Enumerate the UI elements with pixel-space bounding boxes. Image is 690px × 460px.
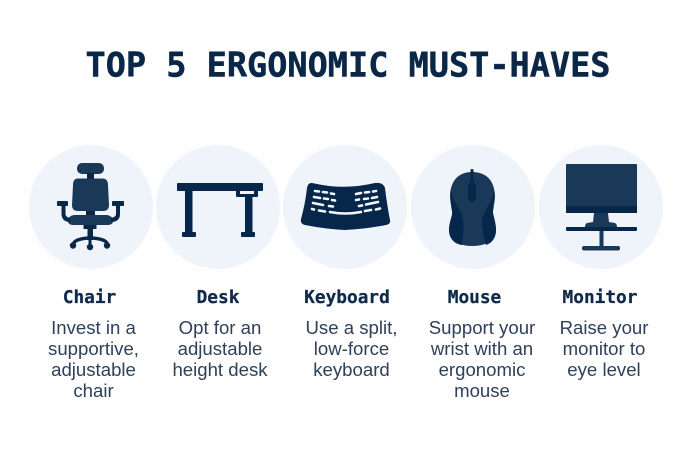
panel: mouse (411, 145, 535, 401)
icon: chair (57, 163, 124, 250)
icon: mouse circle (411, 145, 535, 269)
icon: monitor (566, 164, 637, 250)
text: mouse description: ergonomic (439, 359, 525, 380)
heading: mouse: Mouse (448, 287, 501, 308)
text: keyboard description: keyboard (313, 359, 390, 380)
text: chair description: supportive, (48, 338, 139, 359)
icon: chair circle (29, 145, 153, 269)
panel: chair (29, 145, 153, 401)
heading: chair: Chair (63, 287, 116, 308)
panel: monitor (539, 145, 663, 380)
text: keyboard description: low-force (314, 338, 389, 359)
heading: desk: Desk (197, 287, 240, 308)
heading: keyboard: Keyboard (304, 287, 390, 308)
text: mouse description: wrist with an (430, 338, 533, 359)
title: TOP 5 ERGONOMIC MUST-HAVES (86, 46, 610, 86)
text: monitor description: monitor to (563, 338, 645, 359)
text: desk description: adjustable (178, 338, 262, 359)
text: mouse description: mouse (454, 380, 510, 401)
icon: keyboard (301, 183, 390, 230)
text: monitor description: eye level (567, 359, 641, 380)
text: keyboard description: Use a split, (306, 317, 397, 338)
text: desk description: height desk (172, 359, 268, 380)
icon: keyboard circle (283, 145, 407, 269)
text: chair description: adjustable (51, 359, 136, 380)
text: mouse description: Support your (429, 317, 535, 338)
icon: mouse (449, 169, 496, 246)
panel: desk (156, 145, 280, 380)
icon: monitor circle (539, 145, 663, 269)
text: desk description: Opt for an (179, 317, 261, 338)
icon: desk circle (156, 145, 280, 269)
heading: monitor: Monitor (563, 287, 637, 308)
text: chair description: Invest in a (51, 317, 137, 338)
icon: desk (177, 183, 263, 237)
text: monitor description: Raise your (560, 317, 648, 338)
text: chair description: chair (73, 380, 114, 401)
panel: keyboard (283, 145, 407, 380)
